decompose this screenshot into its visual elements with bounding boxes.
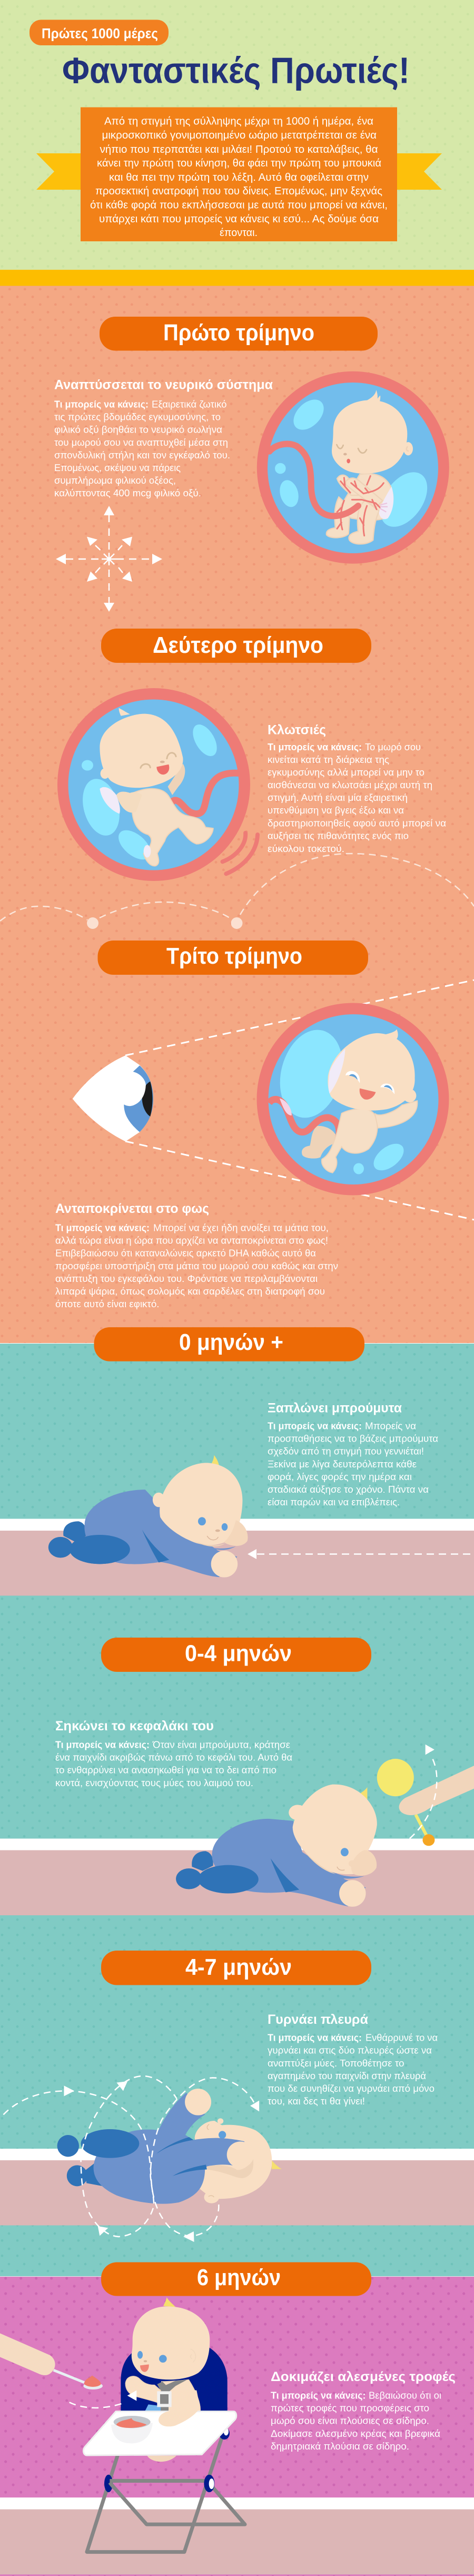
text: tummy time: Μπορείς να [365,1421,416,1431]
panel: intro background [0,0,474,270]
text: nervous system: Τι μπορείς να κάνεις: [54,399,149,409]
dashed bouncing trajectory [0,854,474,929]
intro text box: και θα πει την πρώτη του λέξη. Αυτό θα οφείλεται στην [109,172,369,183]
text: tummy time: σχεδόν από τη στιγμή που γεννιέται! [268,1446,424,1457]
floor [0,1839,474,1915]
heading pill: 4-7 months: 4-7 μηνών [185,1954,292,1980]
text: rolls over: αγαπημένο του παιχνίδι στην πλευρά [268,2071,426,2081]
panel: six months background [0,2276,474,2576]
text: tries pureed food: Δοκίμασε αλεσμένο κρέας και βρεφικά [271,2428,440,2439]
text: lifts head [55,1719,292,1788]
floor [0,2149,474,2226]
text: lifts head: κοντά, ενισχύοντας τους μύες του λαιμού του. [55,1778,253,1788]
text: kicks [268,722,446,854]
panel: infant background [0,1343,474,2277]
badge: first 1000 days [29,20,169,45]
text: kicks: δραστηριοποιηθείς αφού αυτό μπορεί να [268,818,446,829]
text: nervous system: Εξαιρετικά ζωτικό [152,399,226,409]
title: Φανταστικές Πρωτιές! [62,50,410,91]
intro text box: προσεκτική ανατροφή που του δίνεις. Επομένως, μην ξεχνάς [95,185,382,197]
text: rolls over [268,2012,438,2107]
text: nervous system: του μωρού σου να αναπτυχθεί μέσα στη [54,437,228,448]
text: responds to light: λιπαρά ψάρια, όπως σολομός και σαρδέλες στη διατροφή σου [55,1286,325,1297]
text: nervous system: φιλικό οξύ βοηθάει το νευρικό σωλήνα [54,425,222,435]
intro text box: έπονται. [220,227,258,239]
text: responds to light: όποτε αυτό είναι εφικτό. [55,1299,159,1309]
heading pill: third trimester [98,941,368,975]
intro text box: ότι κάθε φορά που εκπλήσσεσαι με αυτά που μπορεί να κάνει, [90,199,388,211]
text: tummy time: Ξεκίνα με λίγα δευτερόλεπτα κάθε [268,1459,417,1470]
text: rolls over: του, και δες τι θα γίνει! [268,2096,365,2107]
floor [0,1519,474,1595]
heading pill: 0-4 months [101,1638,371,1672]
intro text box: μικροσκοπικό γονιμοποιημένο ωάριο μετατρέπεται σε ένα [102,130,377,141]
text: tries pureed food: Τι μπορείς να κάνεις: [271,2390,366,2401]
heading pill: first trimester [100,317,378,351]
text: nervous system: τις πρώτες βδομάδες εγκυμοσύνης, το [54,412,221,423]
text: tummy time: Τι μπορείς να κάνεις: [268,1421,362,1431]
text: nervous system: Αναπτύσσεται το νευρικό σύστημα [54,378,273,393]
ribbon [36,153,442,190]
text: kicks: κινείται κατά τη διάρκεια της [268,755,389,765]
illustration: eye [73,1055,153,1141]
text: kicks: Κλωτσιές [268,722,326,737]
illustration: fetus with developing nerves [257,371,449,564]
heading pill: 6 months [101,2262,371,2296]
text: kicks: εγκυμοσύνης αλλά μπορεί να μην το [268,767,424,778]
text: rolls over: Ενθάρρυνέ το να [366,2033,438,2043]
text: tries pureed food: πρώτες τροφές που προσφέρεις στο [271,2403,429,2414]
text: tries pureed food: μωρό σου είναι πλούσιες σε σίδηρο. [271,2416,429,2426]
heading pill: 0 months: 0 μηνών + [179,1329,283,1355]
text: kicks: Το μωρό σου [365,742,421,752]
text: lifts head: Τι μπορείς να κάνεις: [55,1740,150,1750]
text: tries pureed food: δημητριακά πλούσια σε σίδηρο. [271,2441,409,2452]
text: kicks: υπενθύμιση να βγεις έξω και να [268,805,404,816]
text: tummy time: Ξαπλώνει μπρούμυτα [268,1400,402,1415]
text: tummy time: σταδιακά αύξησε το χρόνο. Πάντα να [268,1484,429,1495]
text: lifts head: το ενθαρρύνει να ανασηκωθεί για να το δει από πιο [55,1765,276,1776]
text: responds to light: αλλά τώρα είναι η ώρα που αρχίζει να ανταποκρίνεται στο φως! [55,1236,328,1246]
heading pill: first trimester: Πρώτο τρίμηνο [163,320,314,346]
text: lifts head: Σηκώνει το κεφαλάκι του [55,1719,214,1733]
intro text box [81,107,397,241]
text: kicks: στιγμή. Αυτή είναι μία εξαιρετική [268,792,408,803]
text: responds to light: προσφέρει υποστήριξη στα μάτια του μωρού σου καθώς και στην [55,1261,338,1271]
text: responds to light [55,1201,338,1309]
intro text box: νήπιο που περπατάει και μιλάει! Προτού το καταλάβεις, θα [100,144,378,155]
text: responds to light: Τι μπορείς να κάνεις: [55,1222,150,1233]
illustration: baby on tummy [48,1455,248,1578]
panel: pregnancy background [0,286,474,1344]
text: rolls over: γυρνάει και στις δύο πλευρές ώστε να [268,2045,432,2056]
arrow: dashed left [248,1549,474,1559]
heading pill: 0-4 months: 0-4 μηνών [185,1641,292,1667]
badge: first 1000 days: Πρώτες 1000 μέρες [42,25,158,41]
text: kicks: αισθάνεσαι να κλωτσάει μέχρι αυτή τη [268,780,432,790]
text: tummy time: είσαι παρών και να επιβλέπεις. [268,1497,400,1507]
text: rolls over: Τι μπορείς να κάνεις: [268,2033,362,2043]
intro text box: Από τη στιγμή της σύλληψης μέχρι τη 1000 ή ημέρα, ένα [104,116,373,128]
text: responds to light: Μπορεί να έχει ήδη ανοίξει τα μάτια του, [153,1222,329,1233]
text: nervous system: συμπλήρωμα φιλικού οξέος, [54,475,176,486]
heading pill: 4-7 months [101,1951,371,1985]
heading pill: 0 months [94,1327,364,1362]
yellow band [0,270,474,286]
text: tries pureed food [271,2369,456,2452]
text: kicks: εύκολου τοκετού. [268,844,344,854]
text: kicks: αυξήσει τις πιθανότητες ενός πιο [268,831,409,841]
text: rolls over: Γυρνάει πλευρά [268,2012,369,2027]
illustration: baby in high chair being spoon-fed [0,2297,245,2552]
text: nervous system: καλύπτοντας 400 mcg φιλικό οξύ. [54,488,201,498]
text: rolls over: που δε συνηθίζει να γυρνάει από μόνο [268,2083,434,2094]
text: nervous system: Επομένως, σκέψου να πάρεις [54,463,181,473]
dashed light rays [125,980,474,1220]
heading pill: 6 months: 6 μηνών [197,2265,281,2290]
floor [0,2497,474,2574]
text: tummy time: φορά, λίγες φορές την ημέρα και [268,1472,412,1482]
text: rolls over: αναπτύξει μύες. Τοποθέτησε το [268,2058,404,2069]
text: responds to light: Ανταποκρίνεται στο φως [55,1201,209,1216]
illustration: fetus responding to light [257,1003,449,1195]
illustration: kicking fetus [57,688,258,881]
text: nervous system: σπονδυλική στήλη και τον εγκέφαλό του. [54,450,230,461]
text: tries pureed food: Δοκιμάζει αλεσμένες τροφές [271,2369,456,2384]
heading pill: third trimester: Τρίτο τρίμηνο [166,943,302,969]
text: tries pureed food: Βεβαιώσου ότι οι [369,2390,441,2401]
intro text box: υπάρχει κάτι που μπορείς να κάνεις κι εσύ... Ας δούμε όσα [99,213,379,225]
text: tummy time: προσπαθήσεις να το βάζεις μπρούμυτα [268,1434,438,1444]
text: responds to light: ανάπτυξη του εγκεφάλου του. Φρόντισε να περιλαμβάνονται [55,1274,318,1284]
text: tummy time [268,1400,438,1507]
illustration: baby rolling over with dashed circular arrows [3,2076,282,2242]
heading pill: second trimester [101,629,371,663]
text: kicks: Τι μπορείς να κάνεις: [268,742,362,752]
text: lifts head: Όταν είναι μπρούμυτα, κράτησε [152,1740,290,1750]
text: lifts head: ένα παιχνίδι ακριβώς πάνω από το κεφάλι του. Αυτό θα [55,1752,292,1763]
intro text box: κάνει την πρώτη του κίνηση, θα φάει την πρώτη του μπουκιά [97,158,381,169]
heading pill: second trimester: Δεύτερο τρίμηνο [153,632,323,658]
text: nervous system [54,378,273,498]
icon: radiating arrows [56,506,162,612]
illustration: baby lifting head and rattle [176,1745,474,1907]
text: responds to light: Επιβεβαιώσου ότι καταναλώνεις αρκετό DHA καθώς αυτό θα [55,1248,316,1259]
